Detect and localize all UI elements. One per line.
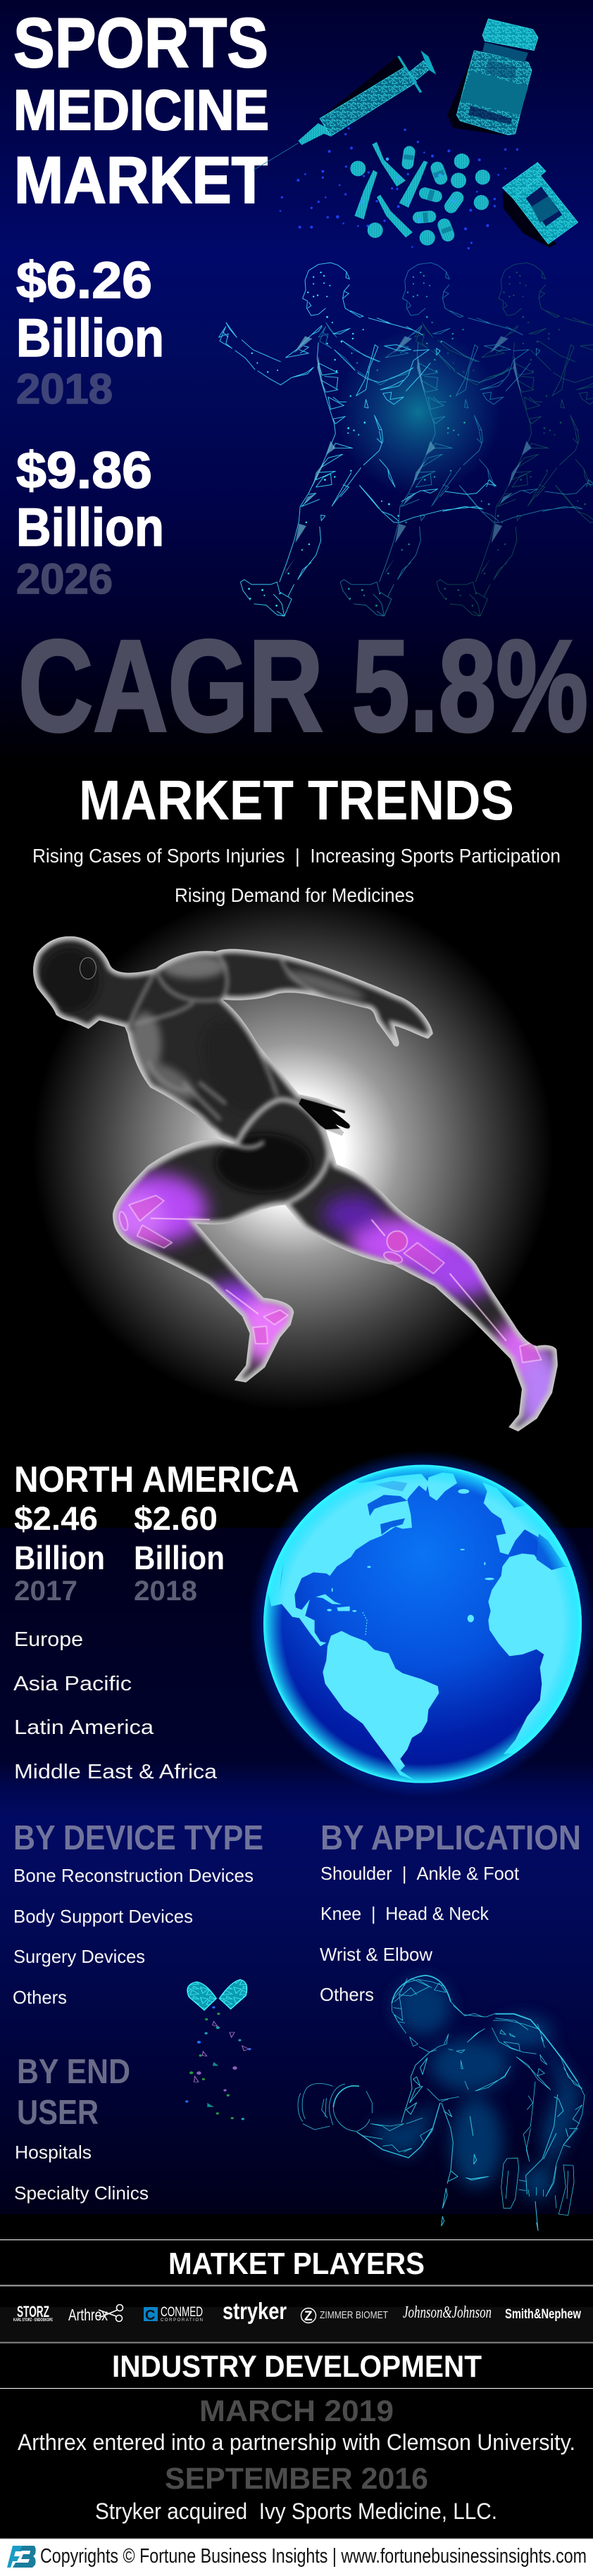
- market value 2018: [16, 252, 164, 413]
- market value 2026: 2026: [16, 555, 113, 603]
- development: September 2016: Stryker acquired Ivy Sports Medicine, LLC.: [95, 2499, 497, 2524]
- logo: Arthrex: Arthrex: [68, 2306, 108, 2324]
- list: other regions: Asia Pacific: [13, 1673, 132, 1695]
- logo: ConMed: [144, 2305, 203, 2323]
- logos band: [0, 2298, 593, 2342]
- segment: by end user: USER: [17, 2094, 99, 2132]
- icon: open capsule with particles: [185, 1980, 251, 2120]
- segment: by end user: Hospitals: [15, 2142, 92, 2163]
- logo: Zimmer Biomet: [301, 2308, 388, 2324]
- title: SPORTS: [13, 4, 268, 82]
- logo: Zimmer Biomet: ZIMMER BIOMET: [320, 2309, 388, 2321]
- market value 2018: 2018: [16, 365, 113, 413]
- logo: Storz: KARL STORZ - ENDOSKOPE: [13, 2318, 53, 2323]
- title: MEDICINE: [13, 79, 269, 142]
- background: footer dark panel: [0, 2214, 593, 2539]
- illustration: sprinter with highlighted joints: [33, 936, 568, 1433]
- market value 2026: $9.86: [16, 442, 152, 499]
- heading: market players: MATKET PLAYERS: [168, 2247, 425, 2281]
- logo: Storz: STORZ: [17, 2303, 49, 2320]
- list: other regions: Middle East & Africa: [14, 1761, 218, 1783]
- North America value 2018: 2018: [134, 1576, 197, 1607]
- segment: by application: [320, 1819, 581, 2005]
- heading: North America: NORTH AMERICA: [14, 1459, 299, 1500]
- segment: by application: Others: [320, 1984, 374, 2005]
- segment: by device type: [13, 1819, 263, 2008]
- segment: by device type: Others: [13, 1987, 67, 2008]
- icon: syringe: [254, 51, 436, 170]
- North America value 2018: $2.60: [134, 1500, 218, 1537]
- North America value 2018: Billion: [134, 1539, 225, 1576]
- segment: by end user: [14, 2053, 149, 2204]
- development: September 2016: [95, 2462, 497, 2524]
- segment: by application: Shoulder | Ankle & Foot: [320, 1863, 520, 1884]
- development: March 2019: Arthrex entered into a partnership with Clemson University.: [18, 2430, 575, 2455]
- icon: pills and capsules: [280, 127, 518, 249]
- title: MARKET: [14, 143, 268, 217]
- segment: by device type: Surgery Devices: [13, 1946, 145, 1967]
- text: market trends list: [32, 845, 561, 906]
- footer: [0, 2539, 593, 2576]
- logo: Stryker: stryker: [223, 2298, 287, 2324]
- icon: medicine bottle: [447, 19, 538, 136]
- segment: by end user: Specialty Clinics: [14, 2182, 149, 2204]
- market value 2026: [16, 442, 164, 603]
- heading: industry development: INDUSTRY DEVELOPMENT: [112, 2349, 482, 2384]
- logo: ConMed: C: [145, 2308, 155, 2323]
- text: market trends list: Rising Cases of Sports Injuries | Increasing Sports Participation: [32, 845, 561, 867]
- list: other regions: Europe: [14, 1628, 83, 1651]
- North America value 2018: [134, 1500, 225, 1607]
- market value 2026: Billion: [16, 498, 164, 558]
- logo: Storz: [13, 2303, 53, 2323]
- icon: Fortune Business Insights logo: [7, 2546, 36, 2568]
- segment: by end user: BY END: [17, 2053, 130, 2091]
- development: March 2019: [18, 2394, 575, 2455]
- market value 2018: Billion: [16, 308, 164, 368]
- background: regions and segments panel: [0, 1528, 593, 2214]
- background: hero panel: [0, 0, 593, 767]
- list: other regions: [13, 1628, 218, 1783]
- background: market trends panel: [0, 767, 593, 1528]
- logo: ConMed: CORPORATION: [161, 2318, 203, 2323]
- development: September 2016: SEPTEMBER 2016: [165, 2462, 428, 2496]
- North America value 2017: $2.46: [14, 1500, 98, 1537]
- icon: medicine box: [502, 163, 578, 248]
- segment: by application: Knee | Head & Neck: [320, 1903, 489, 1924]
- illustration: globe: [249, 1450, 593, 1797]
- market value 2018: $6.26: [16, 252, 152, 309]
- logo: ConMed: CONMED: [161, 2305, 203, 2320]
- development: March 2019: MARCH 2019: [199, 2394, 394, 2428]
- title: [13, 4, 269, 217]
- text: market trends list: Rising Demand for Medicines: [175, 884, 414, 906]
- segment: by application: Wrist & Elbow: [320, 1944, 432, 1965]
- logo: Zimmer Biomet: Z: [304, 2309, 313, 2324]
- light burst behind runner: [32, 889, 554, 1410]
- North America value 2017: Billion: [14, 1539, 105, 1576]
- logo: Johnson & Johnson: Johnson&Johnson: [403, 2304, 492, 2322]
- illustration: running figures: [218, 263, 593, 616]
- illustration: bodybuilder with dumbbells: [298, 1975, 585, 2230]
- list: other regions: Latin America: [14, 1716, 154, 1739]
- heading: market trends: MARKET TRENDS: [79, 769, 514, 831]
- segment: by device type: Bone Reconstruction Devices: [13, 1865, 254, 1886]
- segment: by device type: BY DEVICE TYPE: [13, 1819, 263, 1857]
- North America value 2017: [14, 1500, 105, 1607]
- segment: by device type: Body Support Devices: [13, 1906, 193, 1927]
- North America value 2017: 2017: [14, 1576, 77, 1607]
